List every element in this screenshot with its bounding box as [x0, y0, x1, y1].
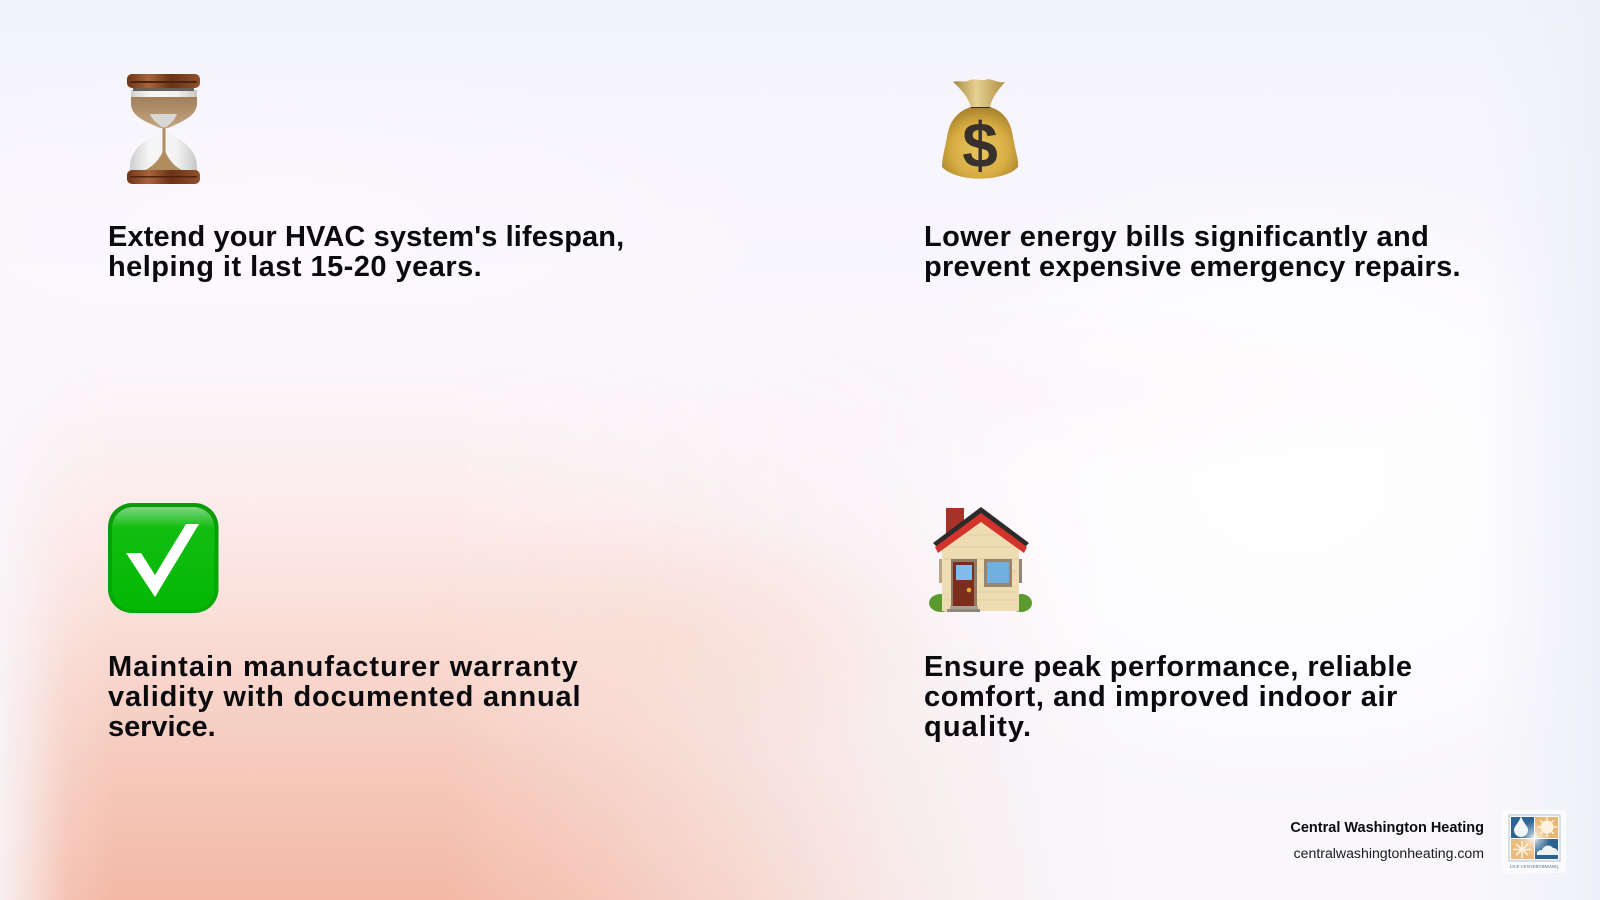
company name: Central Washington Heating [1290, 820, 1484, 836]
panel: performance benefit [924, 507, 1412, 743]
text: warranty: service. [108, 711, 216, 743]
panel: lifespan benefit [108, 74, 624, 283]
text: energy bills: prevent expensive emergency repairs. [924, 251, 1461, 283]
icon: money bag: $ [962, 109, 998, 181]
text: performance: quality. [924, 711, 1032, 743]
text: energy bills: Lower energy bills significantly and [924, 221, 1429, 253]
text: performance [924, 651, 1412, 743]
icon: money bag [942, 79, 1018, 181]
text: warranty [108, 651, 581, 743]
text: warranty: validity with documented annual [108, 681, 581, 713]
icon: hourglass [127, 74, 200, 184]
panel: energy bills benefit [924, 79, 1461, 283]
panel: warranty benefit [108, 503, 581, 743]
logo: LICF CENTERVHMARQ [1509, 864, 1559, 869]
text: energy bills [924, 221, 1461, 283]
logo [1508, 810, 1566, 873]
text: performance: Ensure peak performance, reliable [924, 651, 1412, 683]
icon: house [929, 507, 1032, 612]
text: lifespan: helping it last 15-20 years. [108, 251, 482, 283]
text: lifespan: Extend your HVAC system's lifespan, [108, 221, 624, 253]
text: performance: comfort, and improved indoor air [924, 681, 1398, 713]
icon: green check mark [108, 503, 218, 613]
company website: centralwashingtonheating.com [1294, 845, 1484, 861]
text: lifespan [108, 221, 624, 283]
footer: company branding [1290, 810, 1566, 873]
text: warranty: Maintain manufacturer warranty [108, 651, 579, 683]
